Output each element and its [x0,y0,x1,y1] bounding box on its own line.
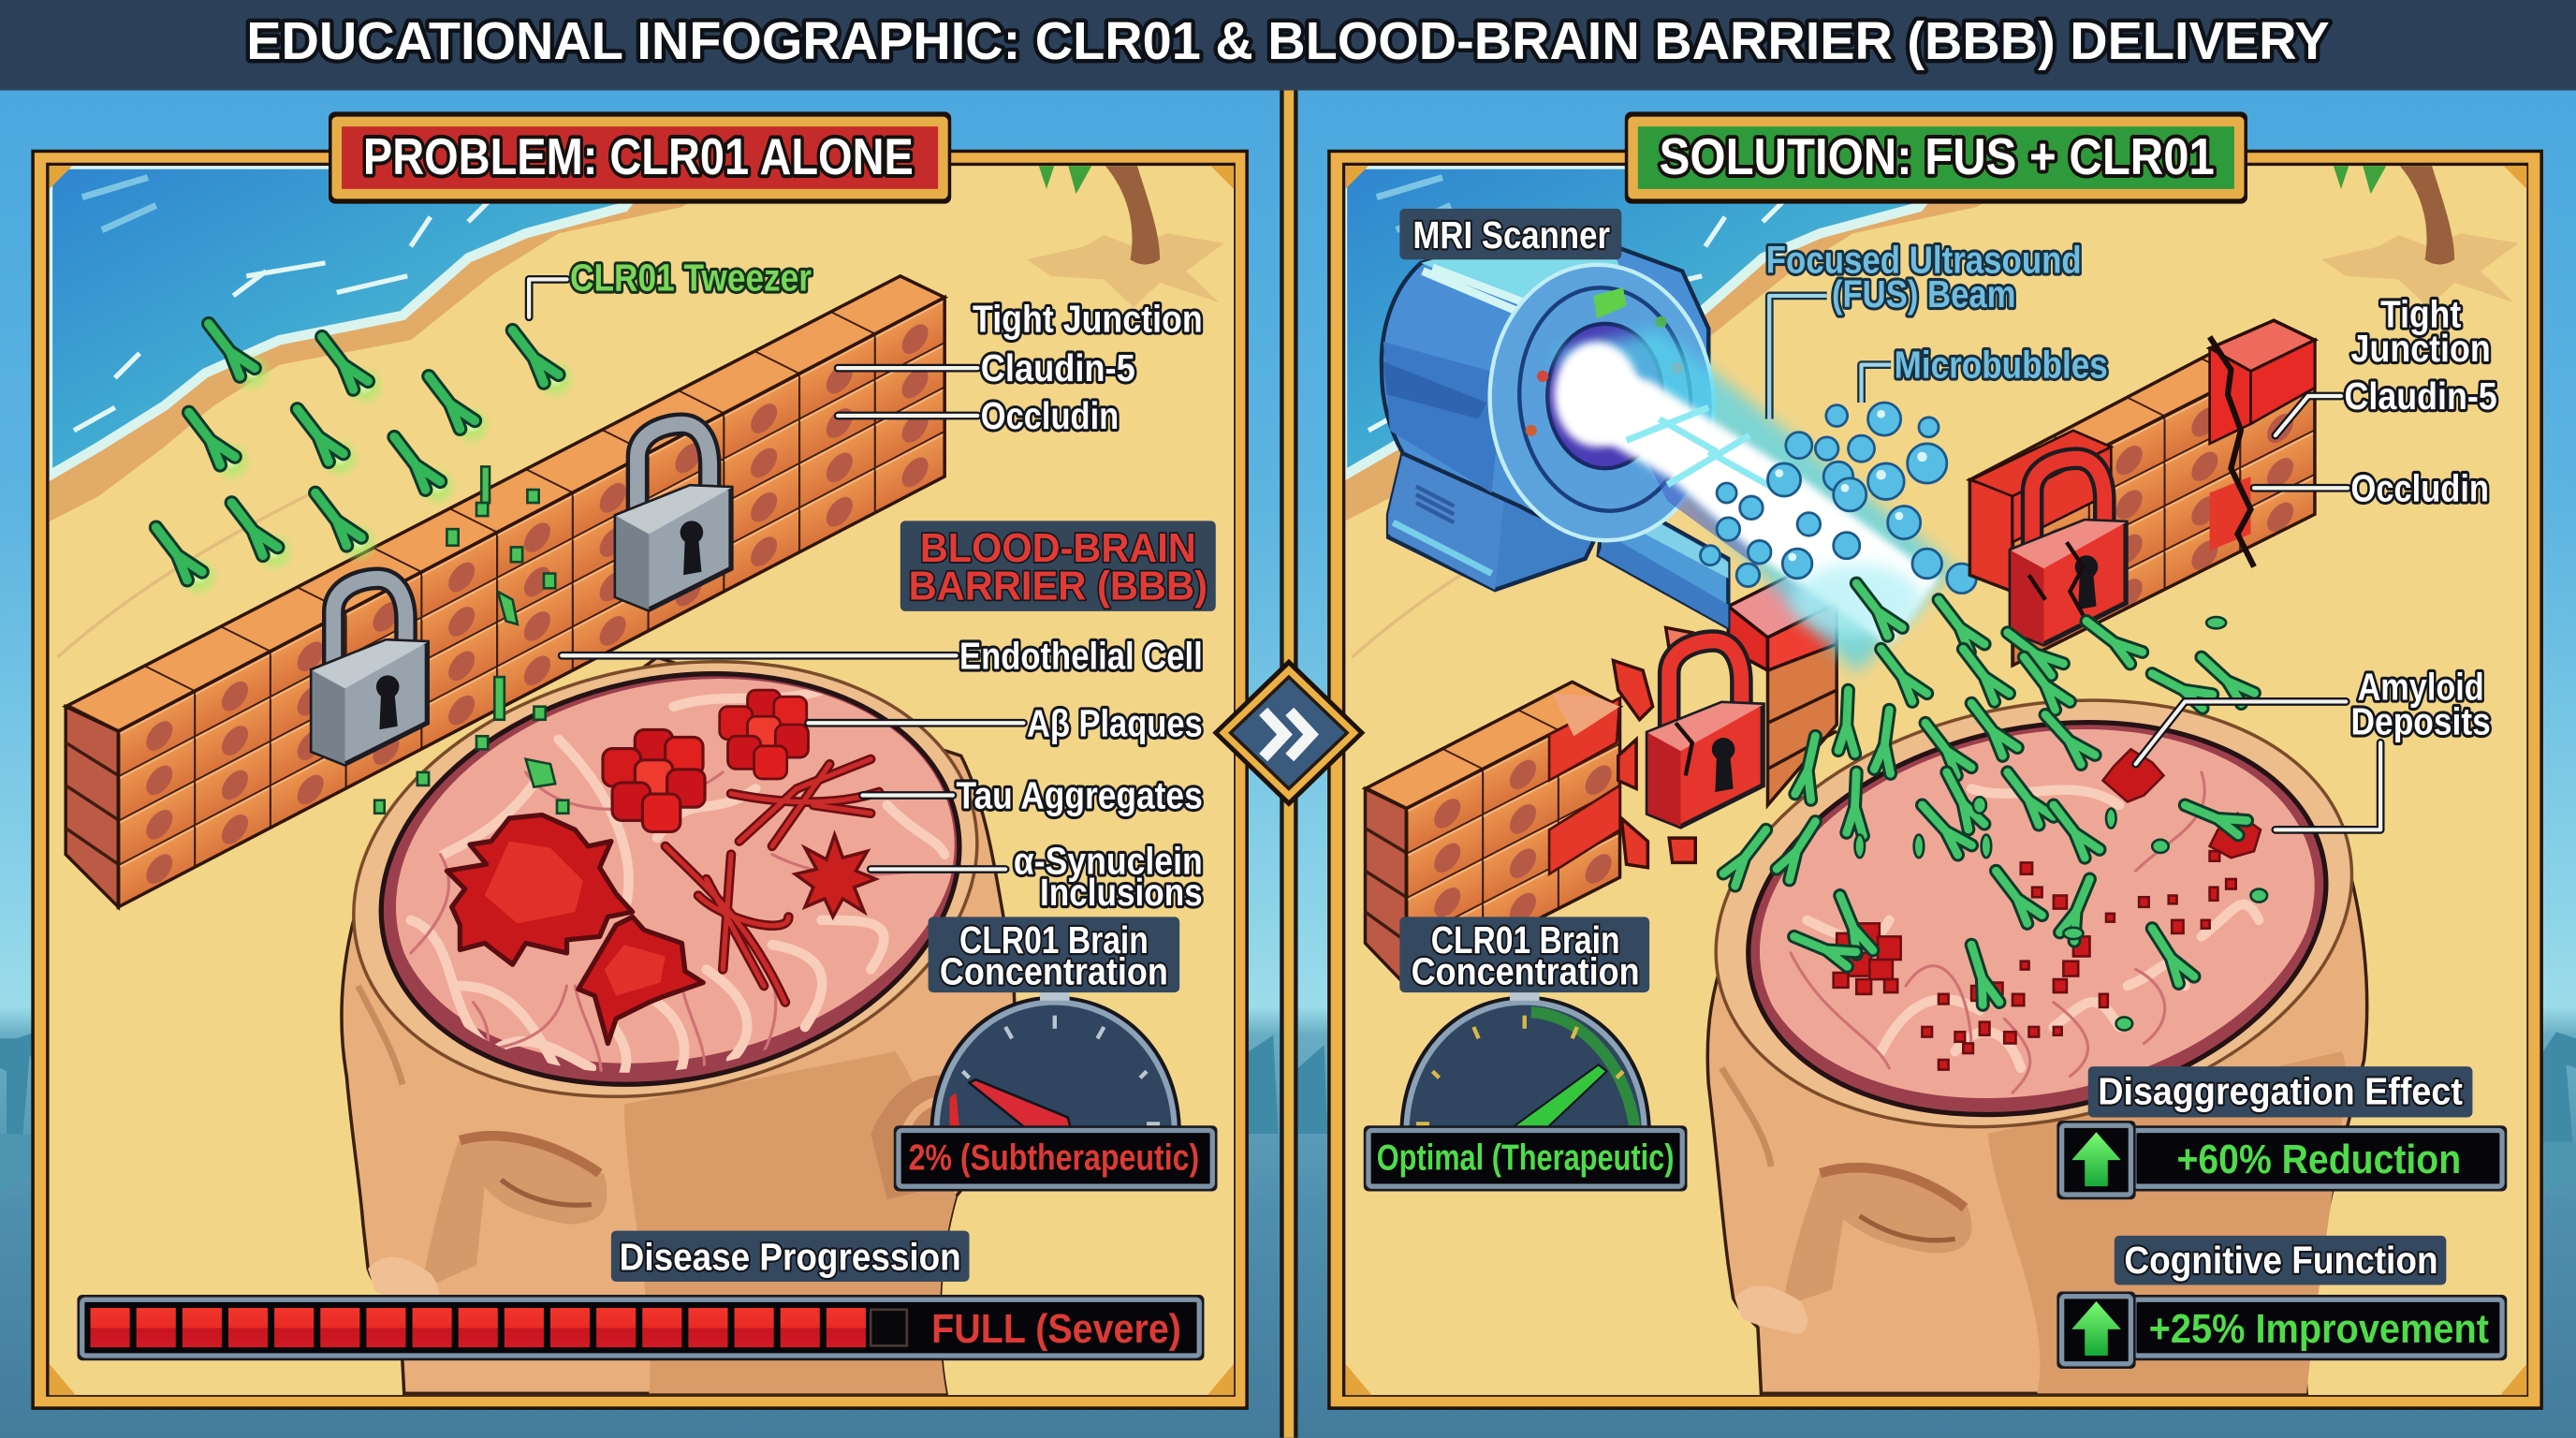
large aggregate blobs [446,815,703,1043]
label: focused ultrasound beam [1766,238,2082,419]
readout: optimal therapeutic [1364,1125,1687,1191]
label: alpha-synuclein inclusions: Inclusions [1040,871,1203,914]
panel: problem CLR01 alone [31,111,1249,1410]
label: microbubbles [1862,344,2108,403]
brain left [396,679,955,1073]
wall left [66,276,944,907]
leaked fragments [374,466,568,814]
wall upper right [1969,320,2315,666]
brain cut ring left [313,606,1018,1152]
progress bar: FULL (Severe) [931,1306,1181,1352]
ribbon: solution [1625,111,2247,204]
label: tight junction: Tight Junction [973,298,1203,341]
label box: cognitive function: Cognitive Function [2124,1239,2438,1282]
wall lower left [1365,682,1620,986]
label box: CLR01 brain concentration right [1399,917,1649,992]
readout: 2% subtherapeutic: 2% (Subtherapeutic) [909,1138,1199,1179]
center divider [1280,91,1298,1438]
debris bricks [1614,627,1695,868]
label: occludin: Occludin [981,394,1119,437]
CLR01 tweezers crossing [1715,583,2256,1010]
label box: disaggregation effect: Disaggregation Effect [2098,1069,2463,1112]
CLR01 tweezers blocked [156,324,577,598]
label: occludin right: Occludin [2351,466,2489,509]
palm silhouettes behind panels [0,1032,2576,1193]
cracked padlock upper [2011,459,2126,644]
label: tight junction right: Junction [2351,327,2491,370]
head left [342,657,1015,1393]
label box: CLR01 brain concentration left [929,917,1179,992]
alpha-synuclein star [795,835,875,917]
label: focused ultrasound beam: Focused Ultrasound [1766,238,2082,281]
brain cut ring right [1676,644,2392,1183]
label box: MRI scanner: MRI Scanner [1412,213,1610,257]
readout: 2% subtherapeutic [894,1125,1218,1191]
header band [0,0,2576,91]
panel frame right [1327,150,2543,1410]
label: tight junction right: Tight [2380,292,2461,335]
readout: optimal therapeutic: Optimal (Therapeutic) [1377,1138,1674,1179]
tau aggregates [666,759,879,1003]
ribbon: solution: SOLUTION: FUS + CLR01 [1660,128,2215,185]
label: tight junction right [2351,292,2491,370]
label: blood-brain barrier: BLOOD-BRAIN [920,525,1196,571]
padlock back [616,424,731,609]
beach scene left [48,165,1237,1397]
small green fragments [1855,617,2267,1030]
frame corners right [1345,166,2526,1395]
bubble highlights [1775,410,1927,561]
cracked padlock lower [1647,640,1763,827]
label: alpha-synuclein inclusions [871,840,1203,914]
stat: +60% reduction [2056,1121,2507,1199]
label: blood-brain barrier [900,521,1216,611]
microbubbles [1701,403,1976,594]
plaques [603,690,809,831]
label: tau aggregates: Tau Aggregates [956,774,1203,817]
label box: CLR01 brain concentration right: CLR01 Brain [1431,918,1620,961]
label: claudin-5: Claudin-5 [981,346,1135,389]
panel frame left [31,150,1249,1410]
label: A-beta plaques: Aβ Plaques [1027,701,1203,744]
label: claudin-5 right [2276,374,2497,435]
label: claudin-5 right: Claudin-5 [2345,374,2497,418]
head right [1705,880,2368,1395]
label: amyloid deposits: Amyloid [2358,666,2484,709]
label: amyloid deposits: Deposits [2351,700,2491,743]
label box: CLR01 brain concentration left: Concentration [940,949,1168,992]
stat: +25% improvement [2056,1292,2507,1369]
label: CLR01 tweezer: CLR01 Tweezer [570,257,812,300]
panel: solution FUS + CLR01 [1327,111,2543,1410]
focused ultrasound beam [1553,329,1955,674]
label box: CLR01 brain concentration left: CLR01 Brain [959,918,1149,961]
label: amyloid deposits [2136,666,2491,829]
MRI scanner [1382,230,1728,627]
padlock front [312,579,427,764]
stat: +60% reduction: +60% Reduction [2177,1137,2461,1182]
label: microbubbles: Microbubbles [1895,344,2108,387]
title: EDUCATIONAL INFOGRAPHIC: CLR01 & BLOOD-BRAIN BARRIER (BBB) DELIVERY [246,11,2330,70]
gauge: brain concentration right [1399,992,1651,1134]
brain right [1760,729,2315,1098]
label box: disease progression: Disease Progression [620,1236,961,1279]
ribbon: problem [329,111,951,204]
amyloid deposits [1834,749,2261,1070]
beach scene right [1342,165,2532,1397]
ribbon: problem: PROBLEM: CLR01 ALONE [363,128,914,185]
red brick stack at beam [1728,572,1837,805]
stat: +25% improvement: +25% Improvement [2149,1306,2489,1352]
frame corners left [50,166,1234,1395]
label: endothelial cell: Endothelial Cell [959,634,1203,677]
label: CLR01 tweezer [529,257,812,317]
label box: CLR01 brain concentration right: Concentration [1412,949,1640,992]
progress bar [77,1295,1204,1360]
center chevron badge [1212,659,1365,807]
gauge: brain concentration left [929,992,1181,1134]
label: alpha-synuclein inclusions: α-Synuclein [1014,840,1203,883]
label: focused ultrasound beam: (FUS) Beam [1832,272,2016,315]
label: blood-brain barrier: BARRIER (BBB) [909,564,1208,609]
